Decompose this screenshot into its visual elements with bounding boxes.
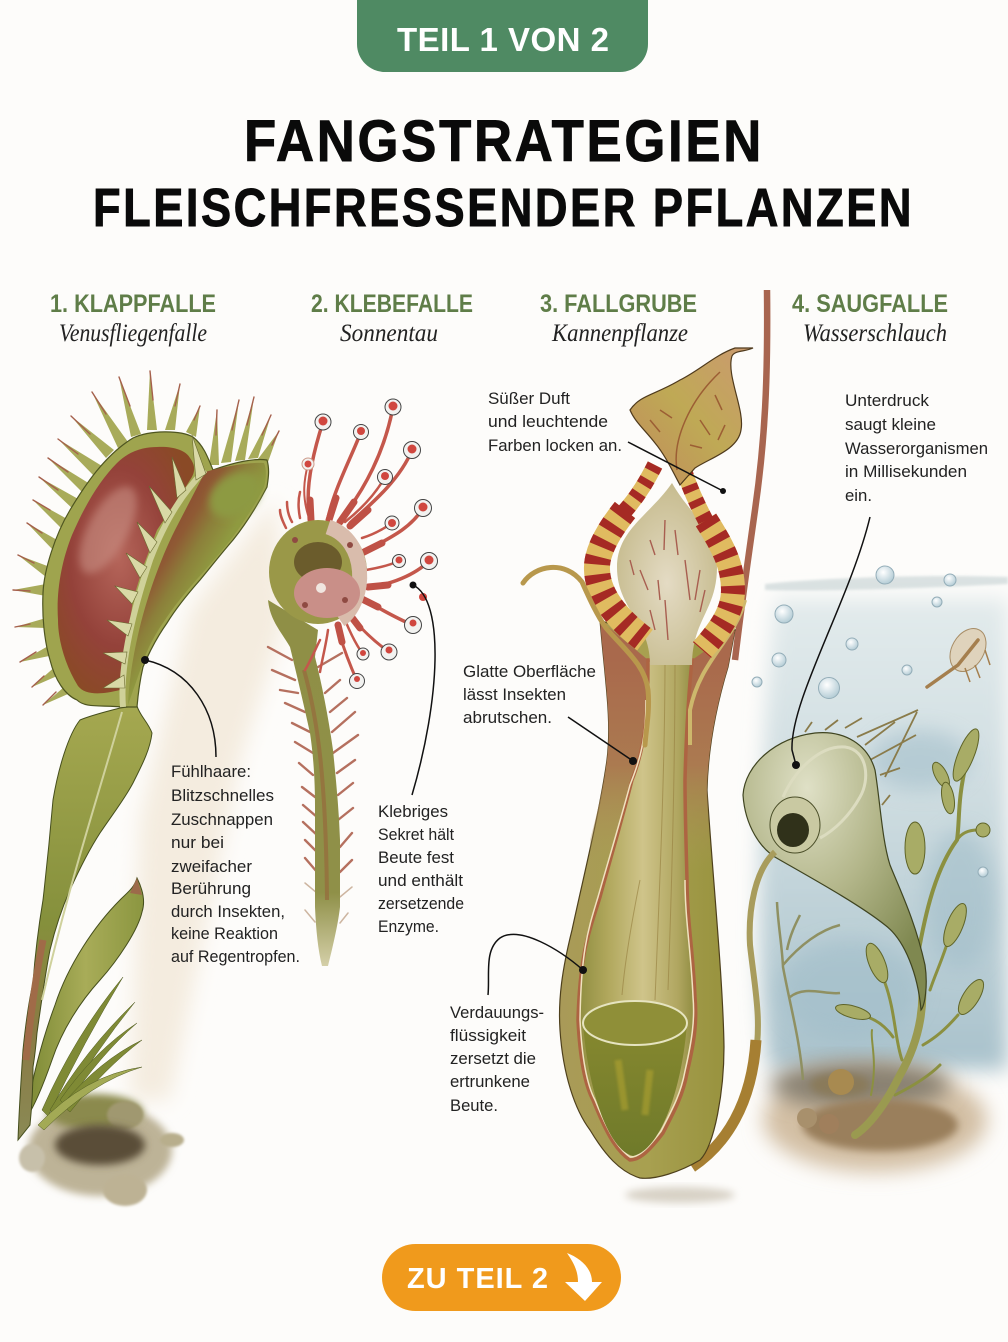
callout: Sekret: Beute fest: [378, 848, 454, 867]
bladder bristles: [805, 710, 918, 805]
left curled tendril: [523, 567, 649, 745]
tentacle thick bases: [310, 498, 388, 642]
badge: part 1 of 2: TEIL 1 VON 2: [397, 21, 609, 58]
water blue blotches: [780, 730, 995, 1040]
right wing: [685, 630, 735, 880]
callout: Duft: Farben locken an.: [488, 436, 622, 455]
callout: Unterdruck: saugt kleine: [845, 415, 936, 434]
callout text: Unterdruck: [845, 391, 930, 410]
bladder door rim: [783, 747, 866, 838]
left wing: [590, 620, 648, 880]
callout: Sekret: Sekret hält: [378, 825, 454, 844]
lid: [630, 348, 753, 485]
callout: Oberfläche: [463, 662, 637, 765]
soil: [763, 1061, 987, 1172]
heading: Klebefalle: 2. KLEBEFALLE: [311, 290, 473, 318]
olive wash on right lobe: [201, 463, 269, 527]
soil mound: [19, 1094, 184, 1206]
illustration: sundew: [268, 399, 438, 966]
tentacles: [280, 407, 429, 681]
callout: Verdauung: zersetzt die: [450, 1049, 536, 1068]
spiral head: [269, 520, 367, 624]
callout: Verdauung: ertrunkene: [450, 1072, 530, 1091]
heading: Saugfalle: Wasserschlauch: [803, 320, 947, 347]
lid vein and speckles: [650, 372, 725, 470]
callout: Fühlhaare: Berührung: [171, 879, 251, 898]
illustration: Venus flytrap: [13, 371, 285, 1206]
pale inner bulb: [617, 483, 717, 665]
dew drops: [302, 399, 438, 688]
heading: Fallgrube: 3. FALLGRUBE: [540, 290, 697, 318]
callout: Unterdruck: in Millisekunden: [845, 462, 967, 481]
heading: Fallgrube: [540, 290, 697, 347]
water surface: [765, 576, 1008, 591]
callout: Sekret: Enzyme.: [378, 917, 439, 936]
peristome left band: [597, 465, 655, 640]
callout: Fühlhaare: Blitzschnelles: [171, 786, 274, 805]
callout text: Glatte Oberfläche: [463, 662, 596, 681]
leader line: [145, 660, 216, 757]
callout text: Klebriges: [378, 802, 448, 821]
leaf tip: [130, 878, 142, 895]
right lobe inner band: [128, 463, 266, 705]
back lobe: [43, 432, 269, 707]
callout: Unterdruck: ein.: [845, 486, 872, 505]
pitcher body: [560, 620, 735, 1178]
peristome right band: [684, 470, 733, 650]
callout: Sekret: und enthält: [378, 871, 463, 890]
callout: Unterdruck: Wasserorganismen: [845, 439, 988, 458]
red spike tips: [13, 371, 279, 705]
callout: Verdauung: [450, 934, 587, 1115]
callout text: Verdauungs-: [450, 1003, 544, 1022]
button: next part: [382, 1244, 621, 1311]
bubbles: [752, 566, 988, 877]
marginal spikes: [13, 371, 279, 705]
callout: Unterdruck: [792, 391, 988, 769]
callout: Fühlhaare: nur bei: [171, 833, 224, 852]
title: [93, 109, 914, 238]
highlight on trap: [68, 478, 148, 582]
heading: Saugfalle: [792, 290, 948, 347]
water flea: [927, 622, 993, 687]
tail stalk to bladder: [750, 852, 775, 1060]
heading: Klebefalle: [311, 290, 473, 347]
bulb speckles: [630, 520, 705, 640]
callout: Verdauung: Beute.: [450, 1096, 498, 1115]
leader line: [412, 585, 435, 795]
callout: Oberfläche: lässt Insekten: [463, 685, 566, 704]
leader line: [568, 717, 633, 761]
inner column with rim: [578, 660, 696, 1160]
leader line: [628, 442, 723, 491]
drop cores: [304, 402, 434, 682]
bladder mouth: [770, 797, 820, 853]
callout: Verdauung: flüssigkeit: [450, 1026, 526, 1045]
leader line: [488, 934, 583, 995]
right branch plant: [870, 760, 978, 1095]
petiole lower reddish stem: [26, 940, 43, 1060]
sprig buds: [834, 726, 990, 1022]
wash shadow behind flytrap: [130, 500, 285, 1100]
rim highlight: [580, 700, 694, 1157]
icon: curved down arrow: [565, 1253, 602, 1301]
illustration: pitcher plant: [523, 290, 775, 1203]
main stem: [855, 960, 922, 1135]
callout: Fühlhaare: durch Insekten,: [171, 902, 285, 921]
lower leaf: [27, 878, 144, 1117]
heading: Klappfalle: [50, 290, 216, 347]
tall tendril: [735, 290, 767, 660]
leader line: [792, 517, 870, 765]
winged petiole: [18, 706, 152, 1140]
callout: Duft: und leuchtende: [488, 412, 608, 431]
callout: Sekret: [378, 582, 464, 936]
callout: Fühlhaare: auf Regentropfen.: [171, 947, 300, 966]
heading: Klappfalle: 1. KLAPPFALLE: [50, 290, 216, 318]
callout: Fühlhaare: keine Reaktion: [171, 924, 278, 943]
right lip: [690, 600, 745, 745]
callout: Fühlhaare: [141, 656, 300, 966]
inner teeth: [103, 435, 206, 707]
callout: Fühlhaare: Zuschnappen: [171, 810, 273, 829]
sundew stem streak: [304, 670, 327, 900]
petiole midrib: [42, 712, 122, 1000]
heading: Klappfalle: Venusfliegenfalle: [59, 320, 207, 347]
digestive liquid: [583, 1001, 687, 1156]
left sprig: [777, 902, 840, 1080]
heading: Fallgrube: Kannenpflanze: [551, 320, 688, 347]
callout: Duft: [488, 389, 726, 494]
bladder body: [743, 733, 926, 1010]
tail base: [692, 1040, 756, 1167]
column veins: [622, 660, 675, 1000]
ground shadow: [625, 1187, 735, 1203]
callout: Oberfläche: abrutschen.: [463, 708, 552, 727]
grass blades: [38, 977, 142, 1130]
heading: Saugfalle: 4. SAUGFALLE: [792, 290, 948, 318]
callout text: Fühlhaare:: [171, 762, 251, 781]
red trap interior: [58, 447, 194, 693]
callout: Fühlhaare: zweifacher: [171, 857, 252, 876]
water wash: [759, 598, 1008, 1070]
illustration: underwater scene: [743, 566, 1008, 1172]
button: next part: ZU TEIL 2: [407, 1263, 548, 1295]
badge: part 1 of 2: [357, 0, 648, 72]
sundew stem: [268, 600, 340, 966]
sundew stem hairs: [268, 647, 358, 923]
heading: Klebefalle: Sonnentau: [340, 320, 438, 347]
title: FANGSTRATEGIEN: [244, 109, 764, 174]
callout: Sekret: zersetzende: [378, 894, 464, 913]
callout text: Süßer Duft: [488, 389, 570, 408]
